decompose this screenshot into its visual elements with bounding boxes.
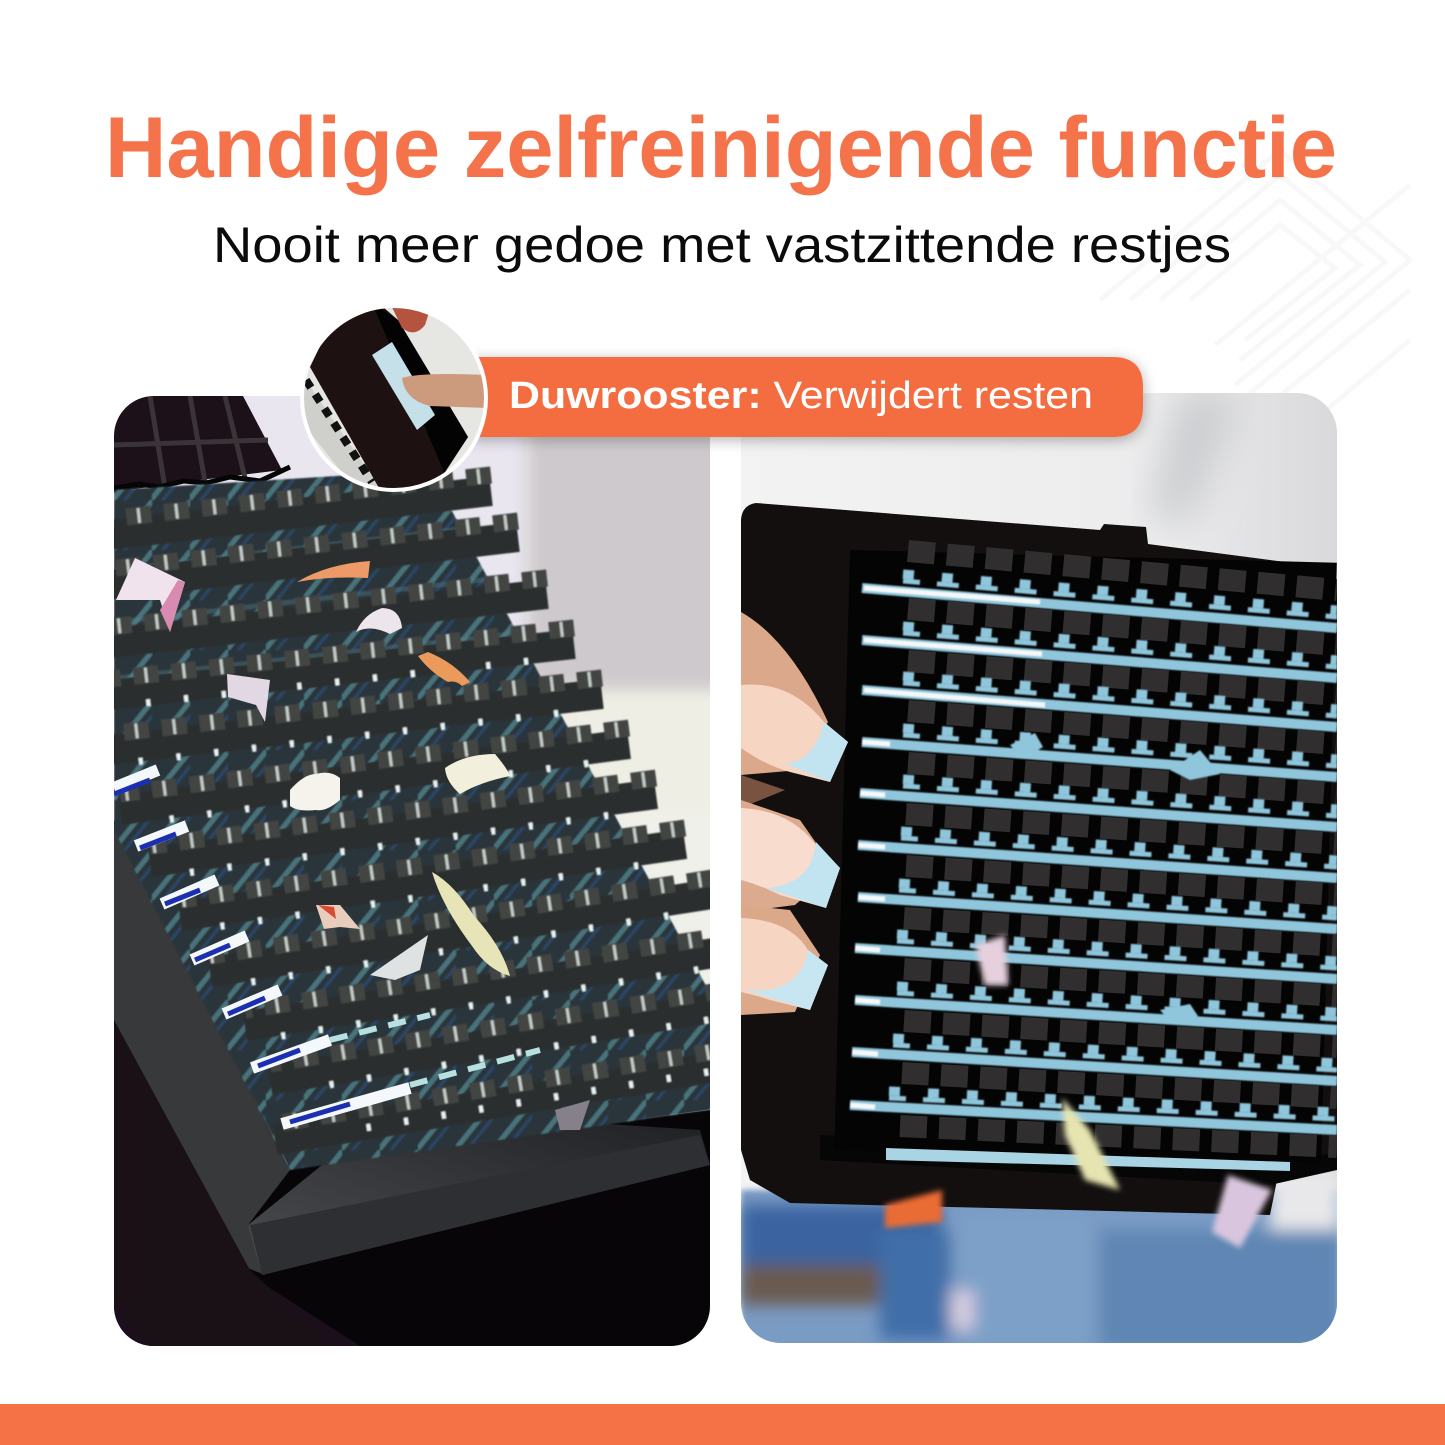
- light blue bars and ridges: [850, 574, 1337, 1130]
- badge text: Duwrooster: Verwijdert resten: [509, 375, 1093, 417]
- dark square rows: [900, 551, 1337, 1147]
- dark body under grid: [114, 820, 710, 1346]
- dark machine top: [114, 396, 290, 492]
- comb rows: [114, 466, 710, 1154]
- background pattern: [1100, 150, 1410, 440]
- subtitle: Nooit meer gedoe met vastzittende restjes: [213, 217, 1231, 273]
- black frame: [741, 503, 1337, 1215]
- title: Handige zelfreinigende functie: [105, 100, 1337, 196]
- icon: circular inset of finger pressing grid: [300, 300, 490, 495]
- panel: left photo, dirty grid with debris: [114, 396, 710, 1346]
- fingers with french nails: [741, 612, 848, 1015]
- panel: right photo, clean grid: [741, 393, 1340, 1350]
- callout: orange badge: [470, 357, 1143, 437]
- debris pieces: [116, 558, 590, 1130]
- footer bar: [0, 1404, 1445, 1445]
- blurred jeans and hands below: [741, 1170, 1340, 1350]
- white and blue slot ends: [114, 770, 540, 1124]
- falling debris: [885, 935, 1272, 1248]
- grid underlay: [114, 470, 735, 1170]
- light blue bar bottom: [886, 1148, 1290, 1171]
